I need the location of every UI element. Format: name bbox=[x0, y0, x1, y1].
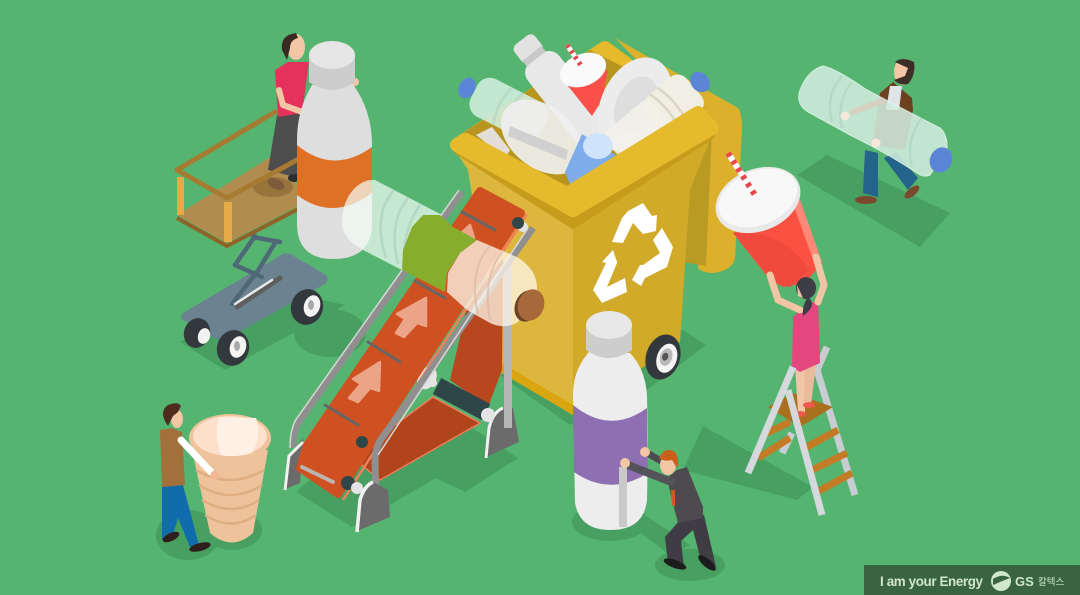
bin left face bbox=[455, 150, 577, 415]
roller hubs bbox=[363, 222, 528, 450]
head bbox=[171, 410, 183, 428]
shoes bbox=[266, 176, 286, 192]
cup rim bbox=[189, 414, 271, 462]
purple label bbox=[573, 405, 648, 485]
cup body bbox=[733, 197, 822, 287]
hair bbox=[659, 450, 678, 468]
ladder top step bbox=[768, 393, 833, 427]
dark roller bbox=[437, 386, 486, 412]
platform rails bbox=[177, 112, 297, 198]
platform back post bbox=[177, 177, 184, 215]
left rail bbox=[293, 192, 462, 448]
rear post bbox=[426, 337, 434, 372]
right section ridges bbox=[475, 246, 502, 320]
icon: recycling symbol bbox=[593, 203, 673, 303]
head bbox=[660, 455, 676, 475]
cart base bbox=[181, 253, 328, 340]
brand name: GS bbox=[1015, 574, 1034, 589]
bottle body bbox=[573, 352, 648, 530]
trash: red cup bbox=[555, 45, 611, 116]
horizontal transparent bottle on conveyor bbox=[342, 180, 549, 326]
rear belt return bbox=[450, 258, 503, 407]
trash: white plate bbox=[583, 45, 687, 165]
trash: small bottle bbox=[476, 127, 510, 158]
ground shadows bbox=[156, 155, 950, 581]
hands bbox=[620, 447, 650, 468]
head bbox=[894, 59, 912, 85]
arm bbox=[279, 90, 305, 113]
bottom rollers bbox=[341, 217, 524, 490]
arms bbox=[850, 100, 884, 113]
woman's legs bbox=[794, 365, 816, 417]
shoes bbox=[161, 530, 212, 554]
man in suit pushing bottle bbox=[620, 447, 718, 573]
trousers bbox=[863, 150, 878, 197]
paper cup bbox=[189, 414, 271, 542]
right rail bbox=[375, 228, 533, 500]
footer branding bar bbox=[864, 565, 1080, 595]
bin front rim bbox=[457, 113, 712, 210]
belt slats bbox=[302, 212, 495, 482]
ladder rear leg bbox=[782, 433, 792, 453]
cup shade bbox=[733, 232, 810, 287]
woman's dress bbox=[792, 300, 820, 372]
front stand bbox=[351, 482, 390, 532]
bin right face bbox=[573, 130, 714, 415]
tie bbox=[671, 490, 675, 507]
cork cap bbox=[510, 286, 549, 325]
brand name Korean: 칼텍스 bbox=[1038, 577, 1064, 588]
ladder steps bbox=[758, 422, 852, 492]
clear section ridges bbox=[381, 190, 420, 264]
cup highlight bbox=[792, 197, 822, 262]
cup lid bbox=[706, 155, 810, 245]
trash: clear big bottle bbox=[487, 84, 597, 190]
hand bbox=[351, 78, 359, 86]
belt arrows bbox=[349, 225, 474, 402]
vest bbox=[160, 428, 185, 487]
lower belt return bbox=[352, 397, 480, 480]
lid top bbox=[710, 158, 806, 238]
trash: blue cup bbox=[565, 133, 617, 184]
aerial platform bbox=[177, 33, 359, 246]
recycling bin bbox=[450, 28, 742, 415]
man with paper cup bbox=[160, 403, 271, 554]
left rail highlight bbox=[290, 190, 459, 448]
platform front post bbox=[224, 202, 232, 242]
tagline: I am your Energy bbox=[880, 574, 984, 589]
clear left section bbox=[342, 180, 442, 270]
clear right section bbox=[447, 240, 537, 326]
bottle cap bbox=[309, 55, 355, 90]
green label bbox=[402, 215, 477, 292]
woman's arms bbox=[770, 257, 824, 310]
belt edge bbox=[343, 214, 527, 500]
big red cup bbox=[706, 153, 822, 287]
shirt bbox=[275, 62, 309, 117]
bin rim underside bbox=[458, 136, 712, 226]
trash: large white bottle bbox=[506, 28, 617, 154]
bin wheel bbox=[640, 330, 686, 384]
shirt bbox=[886, 86, 902, 110]
hair bbox=[163, 403, 181, 426]
woman's head and hair bbox=[796, 277, 816, 316]
jacket bbox=[872, 82, 913, 150]
trash: cream bottle bbox=[601, 59, 722, 171]
bin interior bbox=[463, 50, 705, 187]
scissor lift cart bbox=[180, 236, 328, 370]
icon: GS logo bbox=[991, 571, 1011, 591]
cup inside bbox=[193, 416, 267, 456]
large bottle with orange label bbox=[297, 41, 372, 259]
torso bbox=[667, 467, 703, 523]
bottle with purple label bbox=[573, 311, 648, 530]
bin bottom strip bbox=[500, 362, 573, 415]
shoes bbox=[855, 183, 921, 204]
hair bbox=[282, 33, 298, 60]
bottle cap bbox=[586, 325, 632, 358]
scissor arms bbox=[232, 236, 280, 307]
platform edge bbox=[177, 208, 300, 246]
platform floor bbox=[177, 145, 300, 243]
cup highlight bbox=[217, 417, 258, 456]
bin shaded side strip bbox=[684, 130, 712, 266]
bottle ridges bbox=[830, 76, 922, 166]
orange label bbox=[297, 145, 372, 208]
man carrying bottle bbox=[799, 59, 956, 204]
trash: left clear bottle bbox=[450, 66, 553, 146]
front arm bbox=[628, 465, 674, 483]
clear bottle bbox=[799, 66, 947, 176]
back arm bbox=[647, 453, 663, 462]
trousers bbox=[162, 485, 199, 547]
man in red shirt bbox=[266, 33, 359, 192]
hair and beard bbox=[894, 59, 914, 84]
bin rim bbox=[457, 48, 712, 210]
bar background bbox=[864, 565, 1080, 595]
ladder right rail bbox=[817, 347, 855, 495]
bottle shadow stripe bbox=[619, 467, 627, 527]
left stand bbox=[283, 438, 303, 490]
sleeve bbox=[181, 440, 211, 472]
trousers bbox=[268, 113, 302, 178]
cup ribs bbox=[196, 470, 264, 524]
blue cap bbox=[926, 144, 956, 176]
bin hinge side bbox=[615, 38, 742, 273]
straw bbox=[728, 153, 755, 195]
shoes bbox=[662, 553, 718, 573]
cart wheels bbox=[180, 285, 328, 370]
hands bbox=[840, 112, 880, 148]
conveyor belt bbox=[283, 190, 533, 532]
rear stand bbox=[484, 262, 519, 458]
conveyor belt top bbox=[300, 191, 521, 494]
head bbox=[287, 34, 305, 60]
bottle body bbox=[297, 83, 372, 259]
ladder front rails bbox=[748, 367, 822, 515]
man standing shadow bbox=[253, 177, 293, 197]
ladder with woman bbox=[748, 257, 855, 515]
hand bbox=[210, 470, 220, 480]
legs bbox=[665, 515, 716, 567]
